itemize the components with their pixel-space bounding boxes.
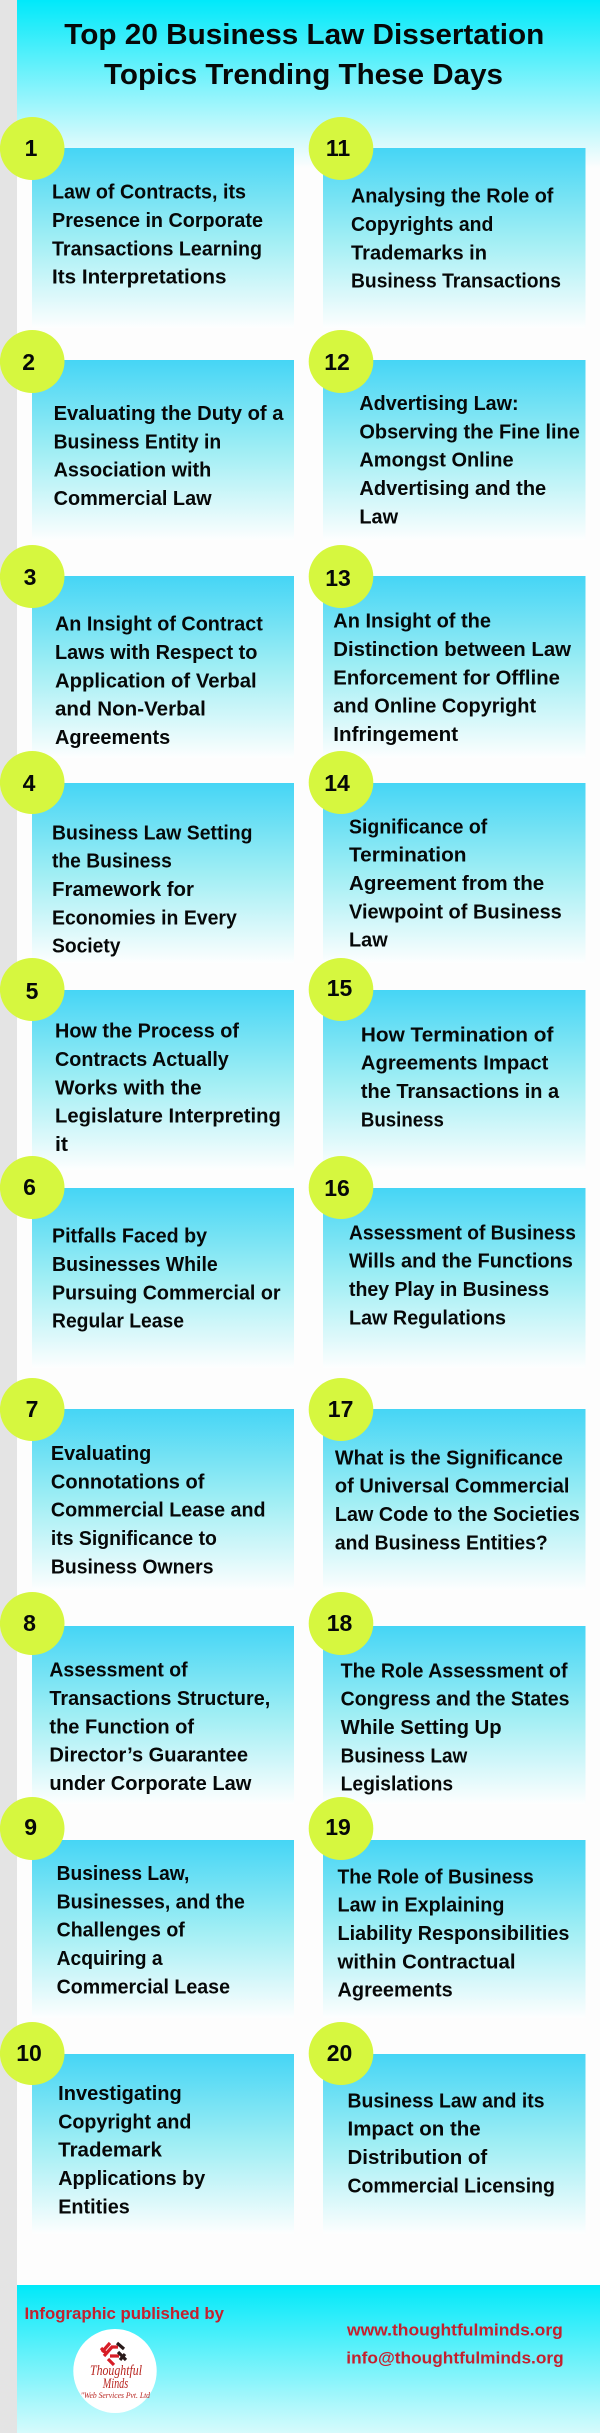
topic 2: 2	[22, 349, 35, 375]
topic 12: Law	[359, 506, 399, 528]
topic 8: Assessment of	[49, 1660, 188, 1682]
topic 10: Entities	[58, 2196, 130, 2218]
topic 4: the Business	[52, 851, 172, 873]
topic 5: Legislature Interpreting	[55, 1106, 281, 1128]
topic 15: 15	[327, 975, 352, 1001]
topic 16: Wills and the Functions	[349, 1251, 573, 1273]
topic 7	[0, 1378, 294, 1590]
logo: Minds	[102, 2376, 128, 2392]
topic 15	[309, 958, 586, 1170]
topic 10: Investigating	[58, 2083, 182, 2105]
logo	[73, 2329, 157, 2413]
topic 6: Regular Lease	[52, 1311, 184, 1333]
topic 2: Association with	[54, 460, 211, 482]
header band	[17, 0, 600, 168]
topic 13: and Online Copyright	[333, 696, 536, 718]
publisher label: Infographic published by	[24, 2304, 224, 2323]
topic 5: it	[55, 1134, 68, 1156]
topic 12: Observing the Fine line	[359, 421, 580, 443]
topic 1	[0, 117, 294, 328]
topic 4: Society	[52, 936, 121, 958]
topic 10: Applications by	[58, 2168, 206, 2190]
title: Top 20 Business Law Dissertation	[64, 19, 544, 51]
website: www.thoughtfulminds.org	[346, 2321, 563, 2340]
topic 13: 13	[325, 565, 351, 591]
topic 3: and Non-Verbal	[55, 699, 206, 721]
topic 12: Advertising and the	[359, 478, 546, 500]
topic 19: Liability Responsibilities	[338, 1923, 569, 1945]
email: info@thoughtfulminds.org	[346, 2348, 564, 2367]
topic 3: Application of Verbal	[55, 670, 257, 692]
topic 8: Director’s Guarantee	[49, 1745, 248, 1767]
topic 6	[0, 1156, 294, 1368]
topic 16: Assessment of Business	[349, 1222, 576, 1244]
topic 11: Trademarks in	[351, 242, 487, 264]
topic 9: Businesses, and the	[57, 1891, 245, 1913]
topic 12: Advertising Law:	[359, 393, 519, 415]
topic 1: Its Interpretations	[52, 267, 226, 289]
topic 19	[309, 1797, 586, 2018]
topic 3: Agreements	[55, 727, 170, 749]
topic 9: Commercial Lease	[57, 1976, 230, 1998]
topic 12: 12	[324, 349, 350, 375]
title: Topics Trending These Days	[104, 59, 503, 91]
topic 18	[309, 1592, 586, 1804]
topic 11: Analysing the Role of	[351, 186, 554, 208]
topic 11: 11	[326, 135, 350, 161]
topic 15: Agreements Impact	[361, 1053, 549, 1075]
topic 5: How the Process of	[55, 1021, 239, 1043]
topic 4: Business Law Setting	[52, 822, 252, 844]
topic 20	[309, 2022, 586, 2234]
topic 14: 14	[324, 770, 350, 796]
topic 7: Connotations of	[51, 1471, 205, 1493]
topic 19: Law in Explaining	[338, 1895, 504, 1917]
topic 8: under Corporate Law	[49, 1773, 252, 1795]
topic 7: Commercial Lease and	[51, 1500, 266, 1522]
topic 1: Law of Contracts, its	[52, 182, 246, 204]
topic 20: Distribution of	[348, 2147, 488, 2169]
topic 17: Law Code to the Societies	[335, 1504, 580, 1526]
title	[64, 19, 544, 91]
topic 12	[309, 330, 586, 540]
topic 15: How Termination of	[361, 1024, 554, 1046]
topic 10: Trademark	[58, 2140, 163, 2162]
topic 3: 3	[24, 564, 36, 590]
topic 2: Commercial Law	[54, 488, 212, 510]
topic 9	[0, 1797, 294, 2018]
topic 15: the Transactions in a	[361, 1081, 560, 1103]
topic 19: within Contractual	[336, 1951, 516, 1973]
topic 2: Business Entity in	[54, 431, 221, 453]
topic 10: Copyright and	[58, 2111, 191, 2133]
topic 14: Significance of	[349, 816, 488, 838]
topic 3	[0, 545, 294, 758]
topic 6: Pursuing Commercial or	[52, 1282, 281, 1304]
footer panel	[17, 2285, 600, 2433]
topic 8: 8	[23, 1610, 36, 1636]
topic 12: Amongst Online	[359, 450, 514, 472]
topic 16	[309, 1156, 586, 1368]
topic 9: 9	[24, 1814, 37, 1840]
topic 14: Termination	[349, 845, 466, 867]
topic 16: they Play in Business	[349, 1279, 549, 1301]
topic 20: Commercial Licensing	[348, 2175, 555, 2197]
topic 8: the Function of	[49, 1716, 194, 1738]
topic 17: What is the Significance	[335, 1447, 563, 1469]
topic 6: Pitfalls Faced by	[52, 1226, 208, 1248]
topic 20: Business Law and its	[348, 2090, 544, 2112]
topic 2: Evaluating the Duty of a	[54, 403, 284, 425]
logo: "Web Services Pvt. Ltd	[81, 2391, 151, 2400]
topic 5	[0, 958, 294, 1170]
logo: Thoughtful	[90, 2363, 142, 2379]
topic 5: Contracts Actually	[55, 1049, 230, 1071]
topic 18: Legislations	[341, 1774, 453, 1796]
topic 7: Evaluating	[51, 1443, 151, 1465]
topic 13: An Insight of the	[333, 611, 491, 633]
topic 13: Distinction between Law	[333, 639, 571, 661]
topic 10: 10	[16, 2040, 42, 2066]
topic 4: 4	[23, 770, 36, 796]
topic 14: Law	[349, 930, 388, 952]
topic 19: Agreements	[338, 1980, 453, 2002]
topic 18: While Setting Up	[341, 1717, 502, 1739]
topic 11	[309, 117, 586, 328]
topic 17: of Universal Commercial	[335, 1476, 570, 1498]
topic 9: Acquiring a	[57, 1948, 163, 1970]
topic 17: and Business Entities?	[335, 1532, 548, 1554]
topic 8: Transactions Structure,	[49, 1688, 270, 1710]
topic 18: The Role Assessment of	[341, 1660, 568, 1682]
topic 19: The Role of Business	[338, 1866, 534, 1888]
topic 3: An Insight of Contract	[55, 614, 263, 636]
topic 20: 20	[327, 2040, 352, 2066]
topic 6: 6	[23, 1174, 36, 1200]
topic 5: 5	[26, 978, 39, 1004]
topic 4	[0, 751, 294, 963]
topic 18: Congress and the States	[341, 1689, 570, 1711]
topic 16: 16	[324, 1175, 350, 1201]
topic 7: its Significance to	[51, 1528, 217, 1550]
topic 13: Enforcement for Offline	[333, 667, 560, 689]
topic 9: Business Law,	[57, 1863, 189, 1885]
topic 19: 19	[325, 1814, 351, 1840]
topic 20: Impact on the	[348, 2119, 481, 2141]
topic 1: 1	[25, 135, 38, 161]
topic 7: Business Owners	[51, 1556, 214, 1578]
topic 4: Framework for	[52, 879, 194, 901]
topic 10	[0, 2022, 294, 2234]
topic 9: Challenges of	[57, 1920, 185, 1942]
topic 13: Infringement	[333, 724, 458, 746]
topic 6: Businesses While	[52, 1254, 218, 1276]
topic 14: Viewpoint of Business	[349, 901, 562, 923]
topic 11: Copyrights and	[351, 214, 493, 236]
topic 14: Agreement from the	[349, 873, 544, 895]
topic 1: Transactions Learning	[52, 238, 262, 260]
topic 14	[309, 751, 586, 963]
topic 11: Business Transactions	[351, 271, 561, 293]
topic 17	[309, 1378, 586, 1590]
topic 4: Economies in Every	[52, 907, 238, 929]
topic 18: 18	[327, 1610, 352, 1636]
topic 15: Business	[361, 1109, 444, 1131]
topic 17: 17	[328, 1396, 353, 1422]
topic 13	[309, 545, 586, 758]
topic 1: Presence in Corporate	[52, 210, 263, 232]
topic 7: 7	[26, 1396, 38, 1422]
topic 5: Works with the	[55, 1077, 202, 1099]
topic 18: Business Law	[341, 1745, 468, 1767]
topic 3: Laws with Respect to	[55, 642, 257, 664]
topic 8	[0, 1592, 294, 1804]
topic 2	[0, 330, 294, 540]
topic 16: Law Regulations	[349, 1307, 506, 1329]
